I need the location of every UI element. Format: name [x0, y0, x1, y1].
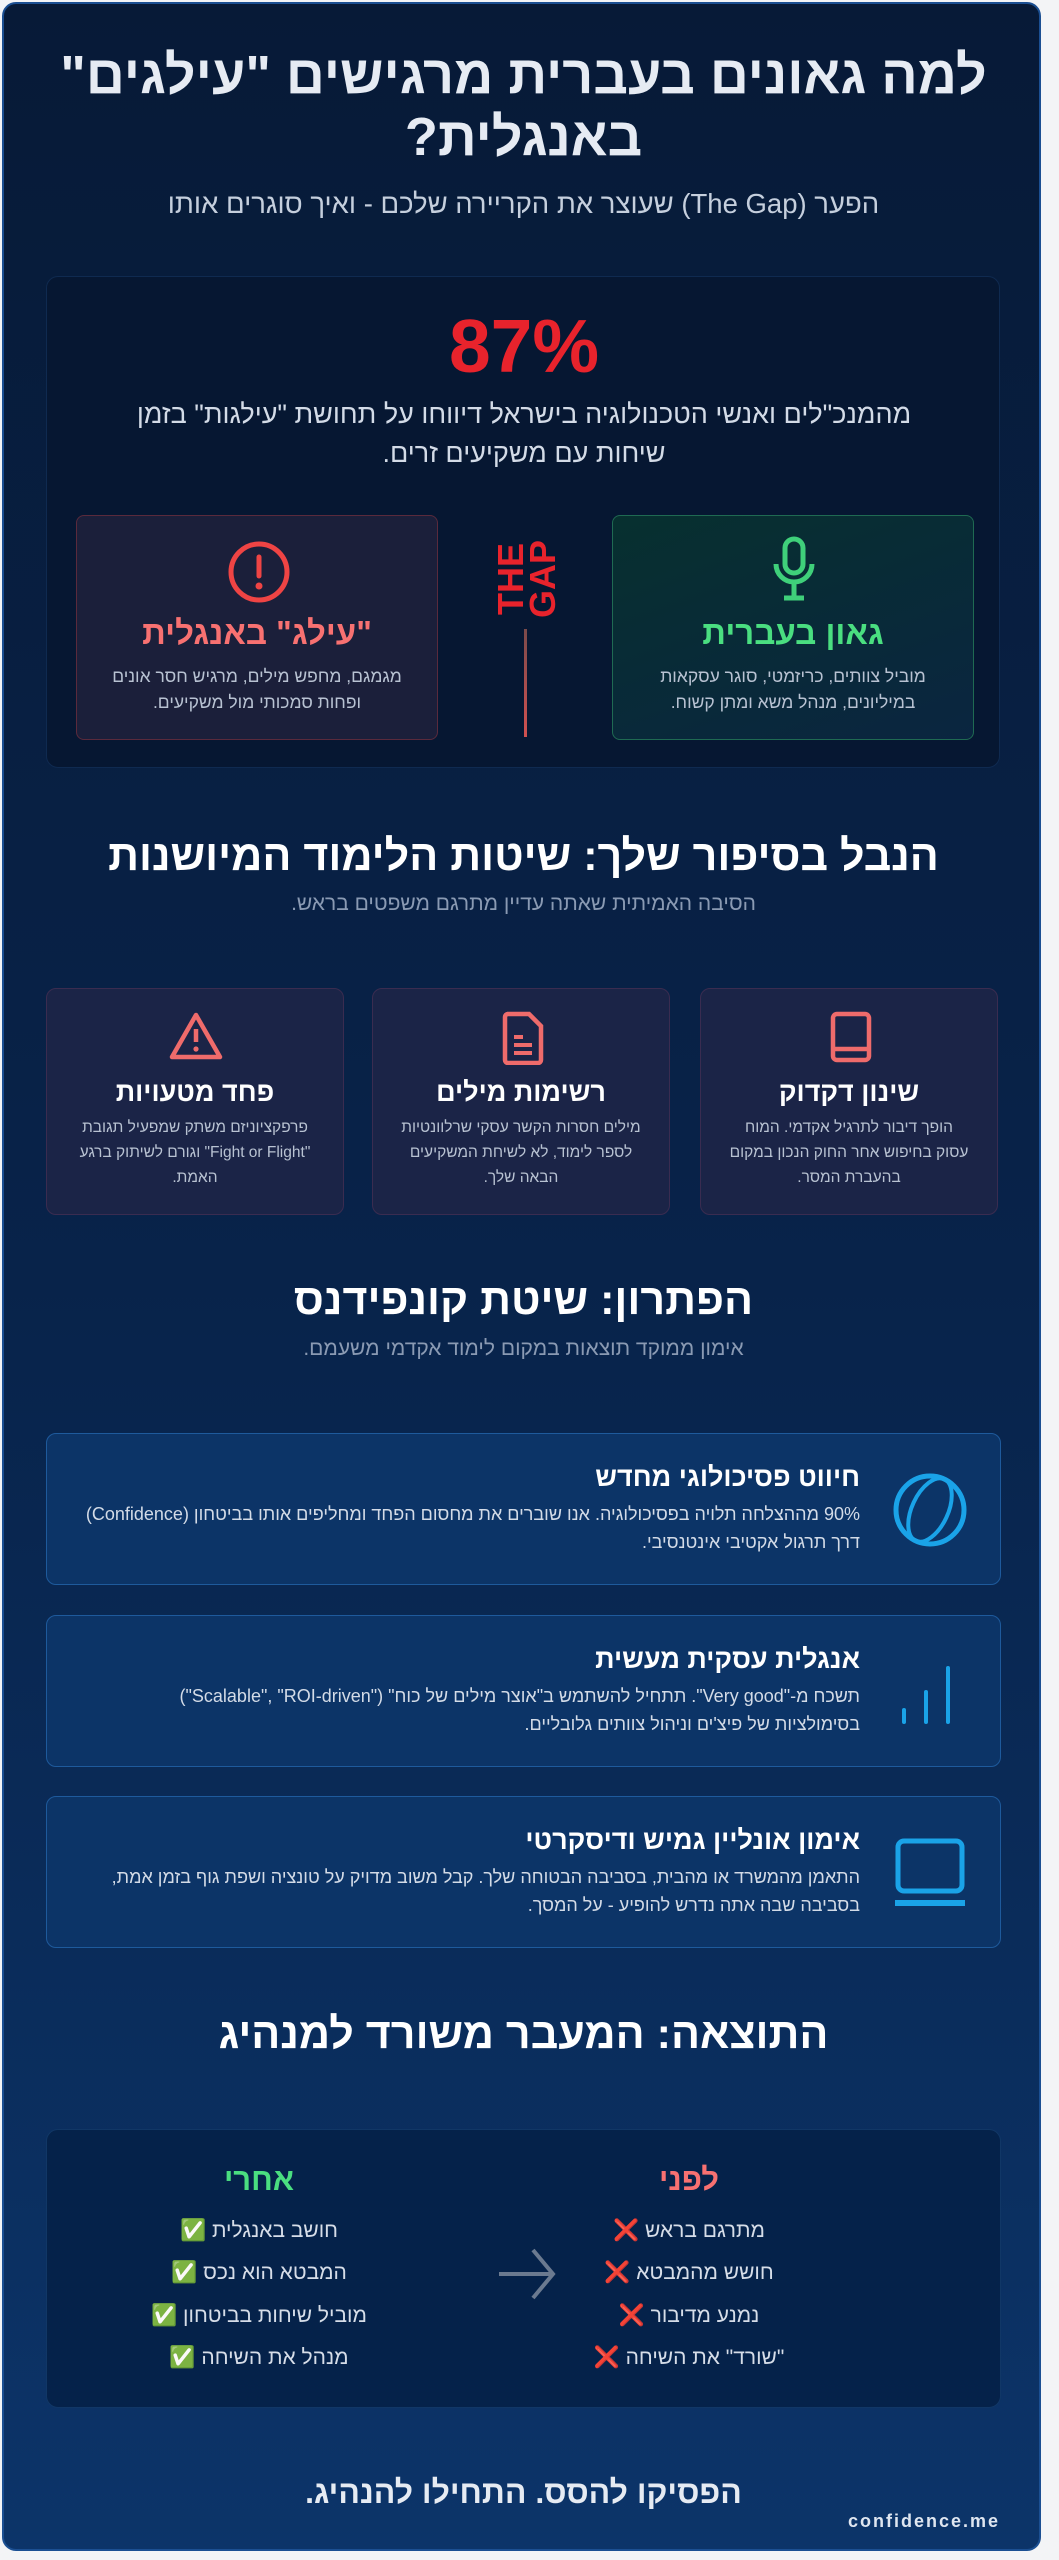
- solution card 1: דרך תרגול אקטיבי אינטנסיבי.: [642, 1532, 860, 1552]
- title: למה גאונים בעברית מרגישים "עילגים": [60, 45, 987, 105]
- solution card 3: בסביבה שבה אתה נדרש להופיע - על המסך.: [528, 1895, 860, 1915]
- label: the gap: THE: [490, 543, 531, 615]
- column: before: נמנע מדיבור ❌: [619, 2304, 759, 2327]
- solution card 2: בסימולציות של פיצ'ים וניהול צוותים גלובליים.: [524, 1714, 860, 1734]
- column: before: חושש מהמבטא ❌: [604, 2261, 774, 2284]
- solution card 3: [46, 1796, 1001, 1948]
- column: before: מתרגם בראש ❌: [613, 2219, 765, 2242]
- box: hebrew genius: מוביל צוותים, כריזמטי, סוגר עסקאות: [660, 666, 926, 686]
- box: hebrew genius: במיליונים, מנהל משא ומתן קשוח.: [671, 692, 915, 712]
- solution card 2: [46, 1615, 1001, 1767]
- solution card 1: חיווט פסיכולוגי מחדש: [595, 1462, 860, 1492]
- panel: before / after: [46, 2129, 1001, 2408]
- section subtitle: אימון ממוקד תוצאות במקום לימוד אקדמי משעמם.: [303, 1337, 744, 1360]
- stat description: [137, 399, 911, 468]
- icon: document: [502, 1012, 544, 1065]
- card: fear of mistakes: פרפקציוניזם משתק שמפעיל תגובת: [82, 1119, 308, 1136]
- card: grammar: עסוק בחיפוש אחר החוק הנכון במקום: [730, 1144, 968, 1161]
- stat number: 87%: [449, 304, 599, 388]
- box: english stammerer: "עילג" באנגלית: [142, 614, 372, 651]
- solution card 1: [46, 1433, 1001, 1585]
- label: the gap: GAP: [522, 540, 563, 618]
- column: before: "שורד" את השיחה ❌: [594, 2346, 784, 2369]
- card: grammar: הופך דיבור לתרגיל אקדמי. המוח: [745, 1119, 953, 1136]
- arrow: [499, 2248, 556, 2300]
- label: the gap: [490, 540, 563, 737]
- solution card 1: 90% מההצלחה תלויה בפסיכולוגיה. אנו שוברים את מחסום הפחד ומחליפים אותו בביטחון (Confidence): [86, 1504, 860, 1524]
- title: באנגלית?: [405, 107, 642, 167]
- stat description: שיחות עם משקיעים זרים.: [382, 438, 666, 468]
- card: word lists: [372, 988, 670, 1215]
- card: fear of mistakes: האמת.: [172, 1169, 218, 1186]
- icon: warning triangle: [170, 1012, 222, 1060]
- column: after: אחרי: [224, 2162, 294, 2197]
- icon: book: [830, 1012, 872, 1062]
- icon: alert circle: [228, 542, 290, 602]
- subtitle: הפער (The Gap) שעוצר את הקריירה שלכם - ואיך סוגרים אותו: [168, 188, 879, 219]
- section heading: solution: הפתרון: שיטת קונפידנס: [294, 1276, 753, 1324]
- icon: bars: [902, 1666, 950, 1724]
- card: fear of mistakes: [46, 988, 344, 1215]
- section heading: old methods: הנבל בסיפור שלך: שיטות הלימוד המיושנות: [108, 832, 939, 880]
- box: english stammerer: מגמגם, מחפש מילים, מרגיש חסר אונים: [112, 666, 402, 686]
- card: grammar: בהעברת המסר.: [797, 1169, 901, 1186]
- card: fear of mistakes: "Fight or Flight" וגורם לשיתוק ברגע: [80, 1144, 310, 1161]
- box: english stammerer: [76, 515, 438, 740]
- card: grammar: שינון דקדוק: [779, 1077, 919, 1107]
- title: [60, 45, 987, 167]
- solution card 2: אנגלית עסקית מעשית: [595, 1644, 860, 1674]
- box: hebrew genius: גאון בעברית: [702, 614, 884, 651]
- solution card 3: התאמן מהמשרד או מהבית, בסביבה הבטוחה שלך. קבל משוב מדויק על טונציה ושפת גוף בזמן אמת,: [112, 1867, 860, 1887]
- icon: laptop: [895, 1838, 965, 1906]
- box: english stammerer: ופחות סמכותי מול משקיעים.: [153, 692, 361, 712]
- column: after: המבטא הוא נכס ✅: [171, 2261, 347, 2284]
- column: before: [594, 2162, 784, 2369]
- card: grammar: [700, 988, 998, 1215]
- card: word lists: מילים חסרות הקשר עסקי שרלוונטיות: [401, 1119, 641, 1136]
- card: word lists: הבאה שלך.: [484, 1169, 558, 1186]
- card: word lists: לספר לימוד, לא לשיחת המשקיעים: [410, 1144, 632, 1161]
- section heading: result: התוצאה: המעבר משורד למנהיג: [219, 2010, 828, 2058]
- panel: stat and gap: [46, 276, 1000, 768]
- column: after: מוביל שיחות בביטחון ✅: [151, 2304, 367, 2327]
- solution card 3: אימון אונליין גמיש ודיסקרטי: [525, 1825, 860, 1855]
- icon: globe ring: [894, 1474, 966, 1546]
- section subtitle: הסיבה האמיתית שאתה עדיין מתרגם משפטים בראש.: [291, 892, 756, 915]
- stat description: מהמנכ"לים ואנשי הטכנולוגיה בישראל דיווחו על תחושת "עילגות" בזמן: [137, 399, 911, 429]
- brand: confidence.me: [848, 2511, 1000, 2531]
- column: before: לפני: [659, 2162, 719, 2197]
- footer call to action: הפסיקו להסס. התחילו להנהיג.: [305, 2474, 742, 2510]
- column: after: מנהל את השיחה ✅: [169, 2346, 349, 2369]
- card: word lists: רשימות מילים: [436, 1077, 606, 1107]
- solution card 2: תשכח מ-"Very good". תתחיל להשתמש ב"אוצר מילים של כוח" ("Scalable", "ROI-driven"): [180, 1686, 860, 1706]
- column: after: חושב באנגלית ✅: [180, 2219, 338, 2242]
- card: fear of mistakes: פחד מטעויות: [116, 1077, 274, 1107]
- box: hebrew genius: [612, 515, 974, 740]
- column: after: [151, 2162, 367, 2369]
- icon: microphone: [774, 536, 814, 600]
